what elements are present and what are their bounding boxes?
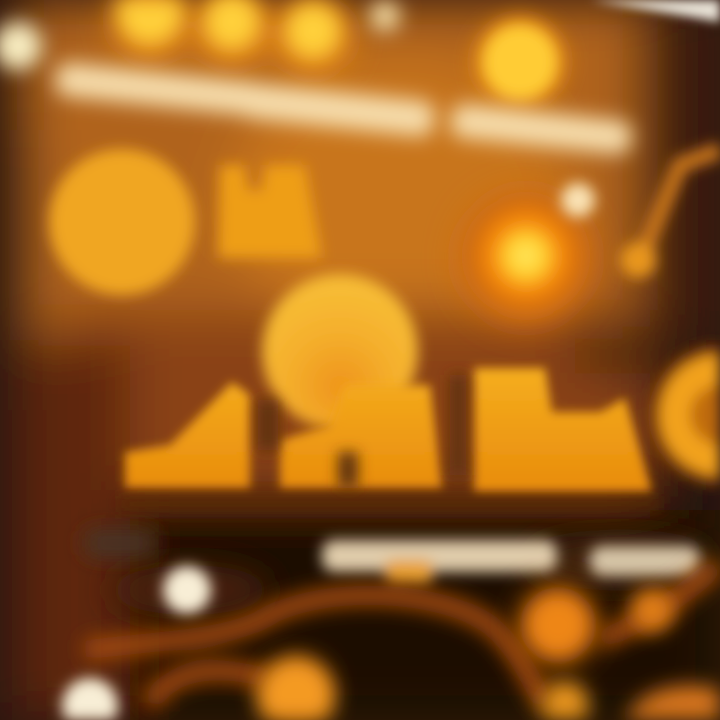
baseline of chart: [120, 500, 660, 508]
right trend line: [620, 150, 720, 278]
title line one: [54, 61, 436, 138]
small white dot: [561, 183, 595, 217]
white dots: [62, 566, 211, 720]
central large circle: [262, 274, 418, 430]
bar icon: [218, 165, 322, 258]
right ring gauge: [650, 345, 720, 485]
bar chart: [125, 368, 652, 492]
faint left caption: [85, 530, 155, 556]
top yellow coin: [474, 16, 566, 108]
title line two: [449, 103, 633, 156]
top row of coins: [112, 0, 400, 74]
warm haze under the curve: [110, 540, 710, 615]
top-left white marker: [0, 22, 42, 70]
large left circle: [49, 149, 195, 295]
glowing circle: [458, 190, 594, 326]
top-right white strip: [590, 0, 720, 22]
lower network line: [85, 565, 718, 705]
lower orange nodes: [258, 587, 720, 720]
dark gaps between chart groups: [258, 375, 466, 488]
lower caption text: [322, 540, 700, 584]
